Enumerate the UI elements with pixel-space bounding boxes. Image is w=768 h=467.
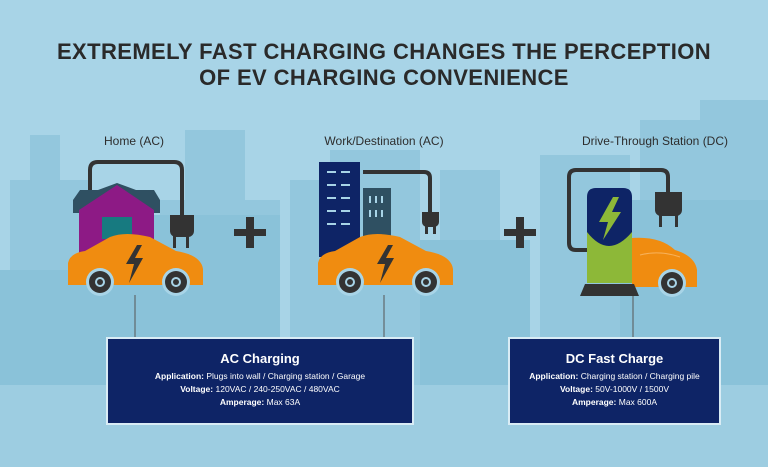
icon: DC station bbox=[569, 170, 697, 338]
title: OF EV CHARGING CONVENIENCE bbox=[199, 65, 569, 90]
icon: home charging bbox=[68, 162, 203, 338]
panel: DC Fast Charge: DC Fast Charge bbox=[566, 351, 663, 366]
icon: plus 1 bbox=[234, 217, 266, 248]
panel: AC Charging: Application: Plugs into wall / Charging station / Garage bbox=[155, 371, 365, 381]
panel: AC Charging: Voltage: 120VAC / 240-250VAC / 480VAC bbox=[180, 384, 340, 394]
panel: AC Charging bbox=[106, 337, 414, 425]
panel: AC Charging: AC Charging bbox=[220, 351, 300, 366]
panel: DC Fast Charge: Voltage: 50V-1000V / 1500V bbox=[560, 384, 669, 394]
label: home: Home (AC) bbox=[104, 134, 164, 148]
panel: DC Fast Charge: Amperage: Max 600A bbox=[572, 397, 657, 407]
title bbox=[57, 39, 711, 90]
icon: plus 2 bbox=[504, 217, 536, 248]
icon: work charging bbox=[318, 162, 453, 338]
panel: DC Fast Charge bbox=[508, 337, 721, 425]
panel: AC Charging: Amperage: Max 63A bbox=[220, 397, 300, 407]
panel: DC Fast Charge: Application: Charging station / Charging pile bbox=[529, 371, 700, 381]
label: work: Work/Destination (AC) bbox=[324, 134, 444, 148]
title: EXTREMELY FAST CHARGING CHANGES THE PERCEPTION bbox=[57, 39, 711, 64]
label: drive-through: Drive-Through Station (DC) bbox=[582, 134, 728, 148]
